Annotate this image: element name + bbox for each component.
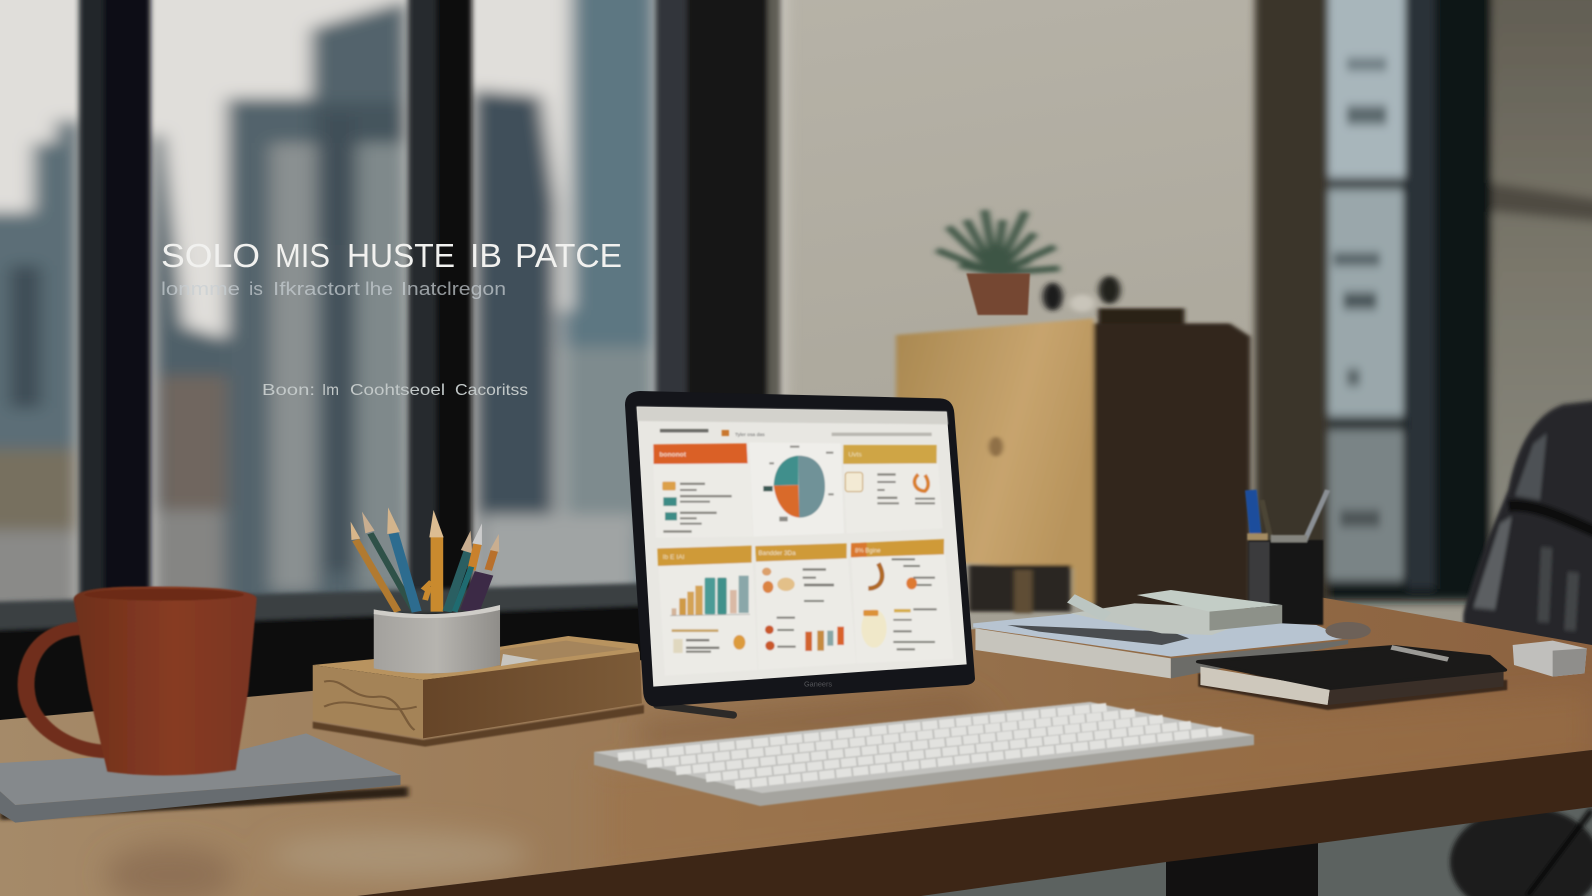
wooden desk bbox=[0, 597, 1592, 896]
storage cabinet and plant bbox=[896, 210, 1250, 613]
desk front edge bbox=[357, 750, 1592, 896]
caption: Boon: bbox=[262, 382, 315, 399]
panel: diagram card: 8% Bgine bbox=[855, 548, 881, 554]
office chair bbox=[1463, 398, 1592, 664]
title bbox=[161, 237, 622, 274]
title: MIS bbox=[275, 237, 330, 274]
tablet stand bbox=[657, 705, 733, 715]
white eraser block bbox=[1513, 641, 1587, 677]
pen holder bbox=[1247, 490, 1328, 625]
caption: Cacoritss bbox=[455, 382, 528, 399]
title: SOLO bbox=[161, 237, 260, 274]
subtitle: Ifkractort bbox=[273, 279, 360, 299]
city view through left window bbox=[0, 0, 781, 620]
subtitle bbox=[161, 279, 506, 299]
panel: pie chart bbox=[749, 442, 844, 537]
tablet bezel bbox=[625, 391, 975, 707]
mug handle bbox=[26, 628, 107, 752]
desk leg bbox=[1166, 840, 1318, 896]
caption: Coohtseoel bbox=[350, 382, 445, 399]
panel: yellow card bbox=[843, 445, 943, 533]
tablet showing dashboard bbox=[625, 391, 975, 715]
keyboard bbox=[594, 702, 1254, 806]
desk top bbox=[0, 597, 1592, 896]
key rows bbox=[618, 707, 1222, 785]
screen toolbar: Tyler osa das bbox=[735, 432, 765, 438]
subtitle: is bbox=[249, 279, 263, 299]
desk reflections and shading bbox=[105, 690, 1592, 896]
notebook under mug bbox=[0, 733, 408, 823]
floor under desk bbox=[900, 740, 1592, 896]
bar chart bbox=[670, 576, 750, 616]
papers, books and stationery bbox=[973, 490, 1587, 710]
subtitle: Inatclregon bbox=[401, 279, 506, 299]
pencils bbox=[351, 507, 499, 612]
window frames bbox=[79, 0, 781, 612]
caption: Im bbox=[322, 382, 339, 399]
pie chart bbox=[774, 456, 825, 518]
pencil holder on wooden tray bbox=[313, 507, 644, 747]
coffee mug bbox=[26, 586, 257, 775]
title: PATCE bbox=[515, 237, 622, 274]
title: IB bbox=[470, 237, 502, 274]
caption bbox=[262, 382, 528, 399]
tablet brand label: Ganeers bbox=[804, 680, 832, 689]
black notebook bbox=[1198, 647, 1507, 710]
subtitle: lhe bbox=[365, 279, 393, 299]
wooden tray bbox=[313, 636, 644, 747]
small books and papers bbox=[1071, 590, 1371, 639]
right column, window and wall bbox=[1255, 0, 1592, 622]
window sill bbox=[0, 582, 700, 740]
panel: diagram card bbox=[851, 539, 953, 663]
white cup bbox=[374, 605, 500, 673]
panel: orange card: bononot bbox=[659, 451, 687, 458]
panel: bar chart card: Ib E IAI bbox=[663, 554, 685, 561]
icon: potted plant bbox=[937, 210, 1120, 315]
panel: bar chart card bbox=[657, 546, 757, 676]
title: HUSTE bbox=[347, 237, 455, 274]
screen toolbar bbox=[637, 407, 948, 438]
tablet screen bbox=[637, 407, 967, 687]
folder bbox=[973, 613, 1348, 678]
panel: orange card bbox=[653, 443, 753, 538]
panel: icons and bars card: Bandder 3Da bbox=[758, 550, 796, 557]
panel: yellow card: Uvts bbox=[848, 452, 862, 459]
subtitle: lonmme bbox=[161, 279, 240, 299]
panel: icons and bars card bbox=[755, 543, 856, 670]
